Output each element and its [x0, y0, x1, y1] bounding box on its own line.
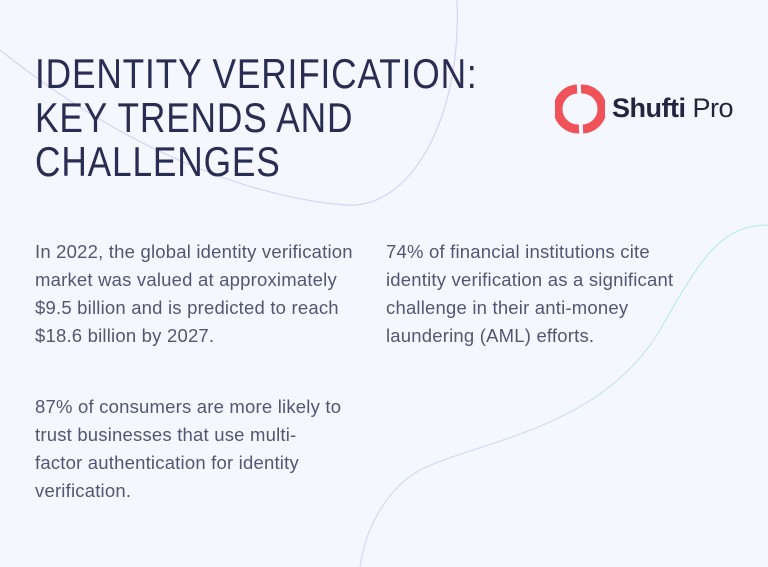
title: CHALLENGES: [35, 138, 281, 185]
text: market value: market was valued at approximately: [35, 269, 337, 290]
text: consumers trust: trust businesses that use multi-: [35, 424, 296, 445]
text: financial institutions: 74% of financial institutions cite: [386, 241, 650, 262]
logo text: Shufti Pro: [612, 93, 733, 123]
text: financial institutions: challenge in their anti-money: [386, 297, 628, 318]
title: KEY TRENDS AND: [35, 94, 353, 141]
text: consumers trust: [35, 396, 341, 501]
text: financial institutions: laundering (AML) efforts.: [386, 325, 594, 346]
text: financial institutions: [386, 241, 673, 346]
text: market value: $18.6 billion by 2027.: [35, 325, 214, 346]
text: market value: [35, 241, 353, 346]
text: market value: $9.5 billion and is predicted to reach: [35, 297, 339, 318]
text: consumers trust: factor authentication for identity: [35, 452, 299, 473]
text: consumers trust: 87% of consumers are more likely to: [35, 396, 341, 417]
title: [35, 50, 478, 185]
text: financial institutions: identity verification as a significant: [386, 269, 673, 290]
title: IDENTITY VERIFICATION:: [35, 50, 478, 97]
text: market value: In 2022, the global identity verification: [35, 241, 353, 262]
logo: Shufti Pro: [555, 84, 733, 134]
icon: logo ring: [555, 84, 605, 134]
text: consumers trust: verification.: [35, 480, 131, 501]
